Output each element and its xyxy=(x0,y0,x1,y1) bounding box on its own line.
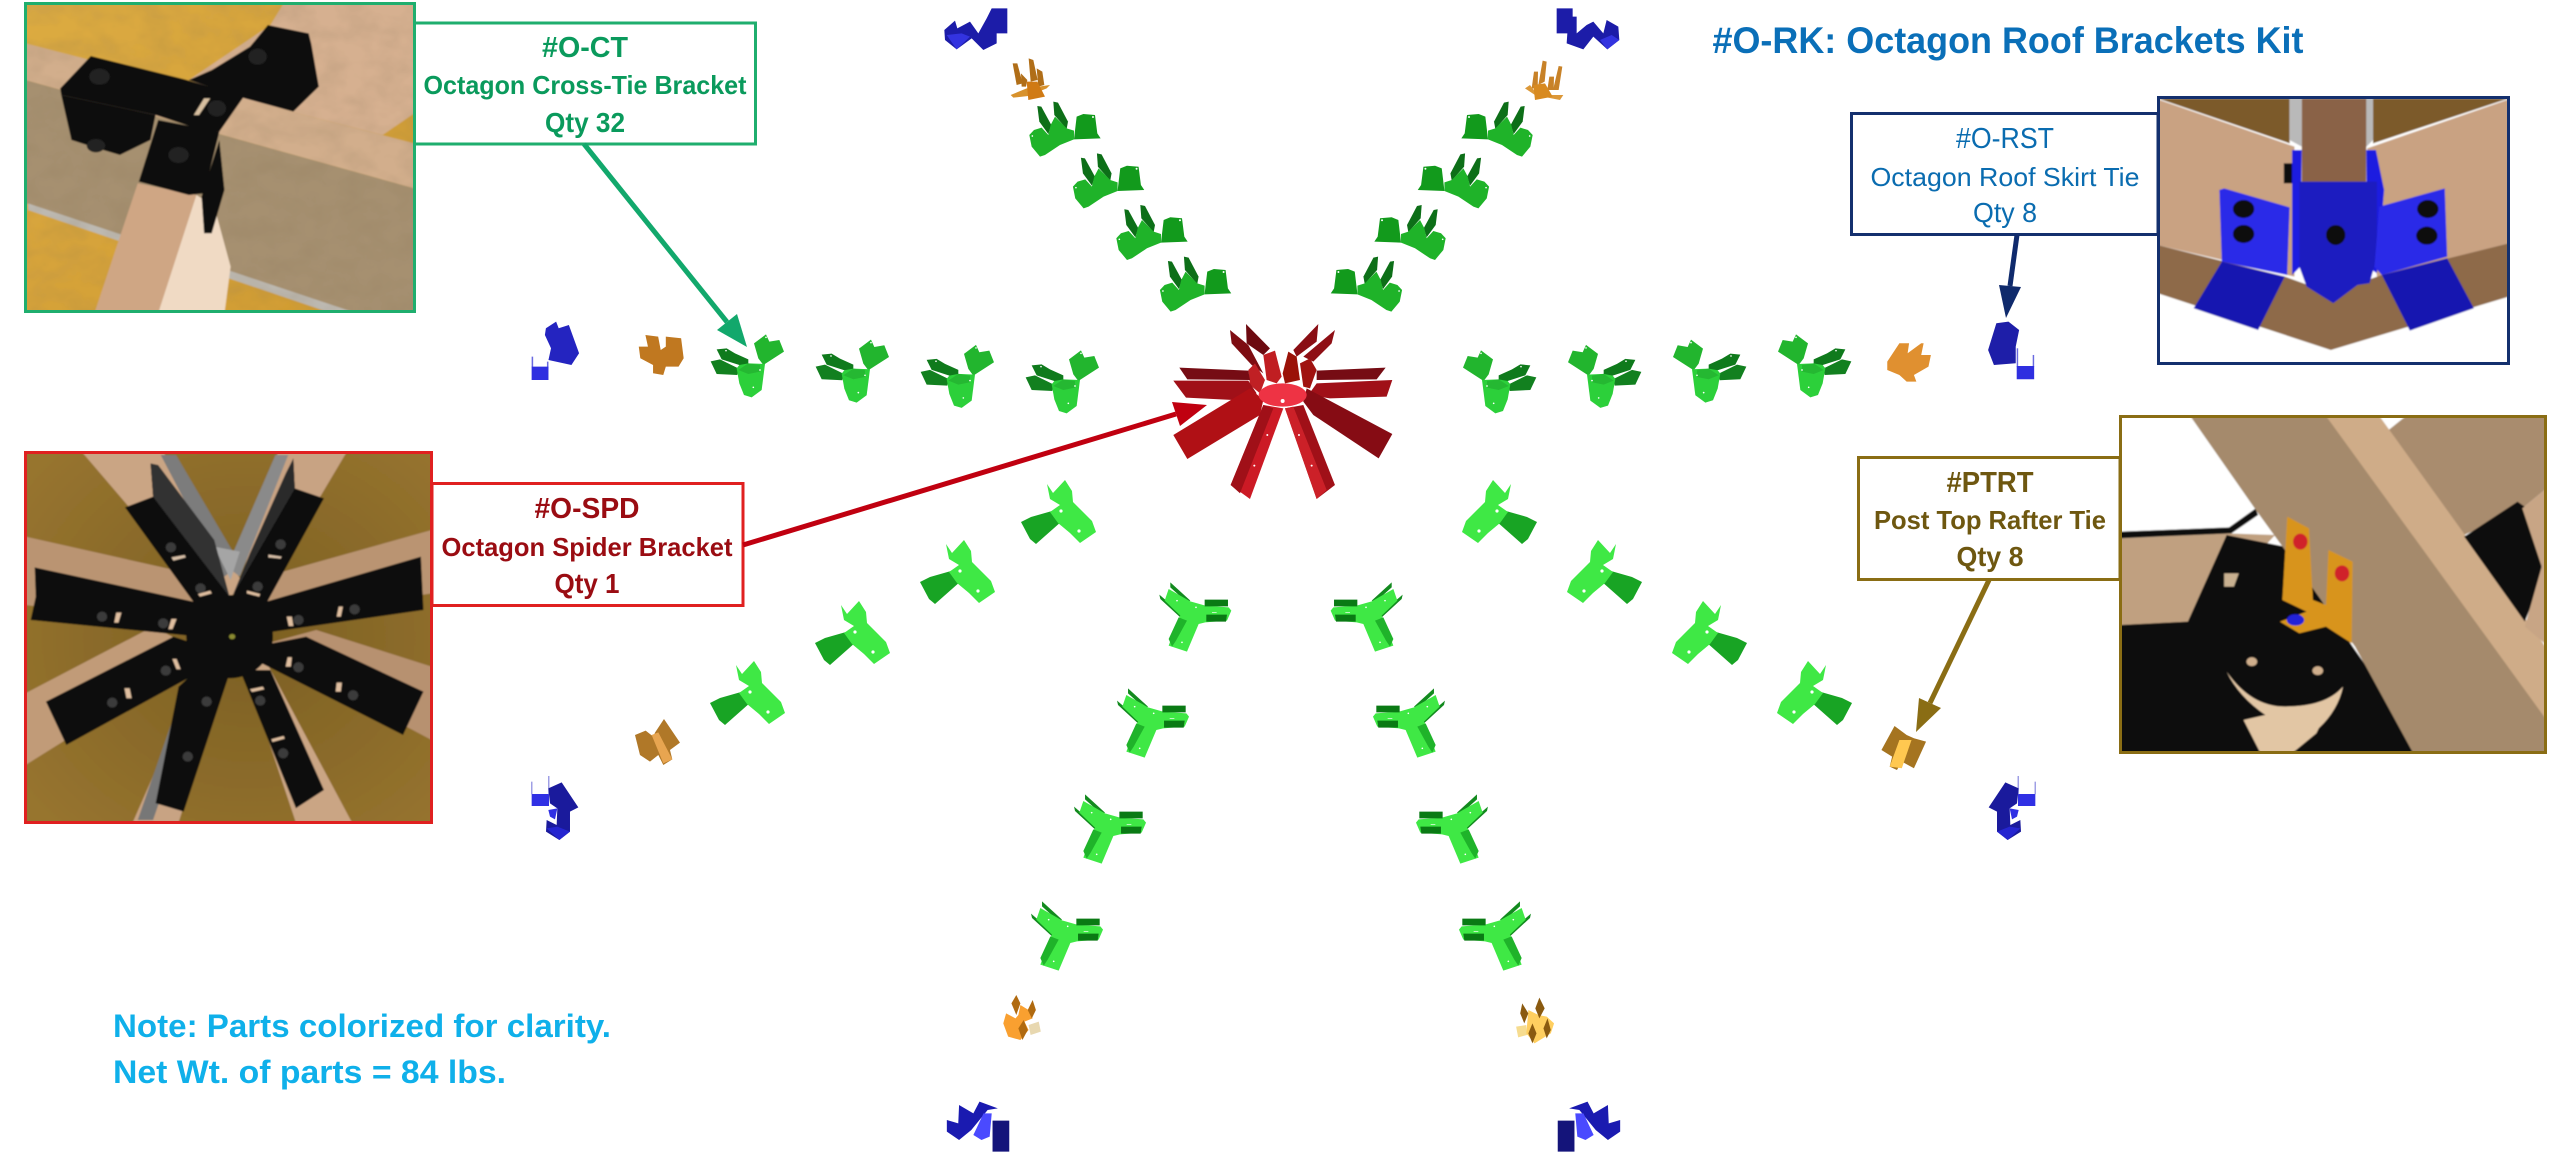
brackets: upper left diagonal xyxy=(1029,102,1231,312)
brackets: right row xyxy=(1463,334,1851,413)
panel: cross-tie bracket photo xyxy=(25,0,415,313)
callout: O-CT label: #O-CT xyxy=(542,32,628,64)
brackets: upper right diagonal xyxy=(1331,102,1533,312)
callout: O-RST label: #O-RST xyxy=(1956,123,2054,155)
note text: Net Wt. of parts = 84 lbs. xyxy=(113,1054,506,1090)
arrow: O-RST to blue tie xyxy=(1999,235,2021,318)
callout: O-RST label: Qty 8 xyxy=(1973,197,2037,228)
callout: O-CT label: Qty 32 xyxy=(545,107,625,138)
title: #O-RK: Octagon Roof Brackets Kit xyxy=(1712,20,2304,61)
callout: PTRT label xyxy=(1858,458,2120,580)
callout: PTRT label: Qty 8 xyxy=(1956,541,2024,572)
panel: post top rafter tie photo xyxy=(2120,416,2547,753)
rafter ties (orange) xyxy=(635,58,1931,1043)
callout: PTRT label: Post Top Rafter Tie xyxy=(1874,505,2106,535)
arrow: PTRT to orange tie xyxy=(1916,580,1989,732)
spider bracket (red) xyxy=(1173,324,1392,499)
callout: O-SPD label: Octagon Spider Bracket xyxy=(442,532,733,562)
callout: O-SPD label: #O-SPD xyxy=(534,493,640,525)
panel: spider bracket photo xyxy=(25,452,432,823)
skirt ties (blue) xyxy=(531,8,2036,1152)
panel: roof skirt tie photo xyxy=(2158,97,2509,364)
callout: O-SPD label: Qty 1 xyxy=(554,568,620,599)
brackets: bottom right column xyxy=(1331,582,1531,971)
brackets: bottom left column xyxy=(1031,582,1231,971)
arrow: O-SPD to spider bracket xyxy=(743,402,1207,545)
callout: O-CT label xyxy=(414,23,756,144)
brackets: lower right diagonal xyxy=(1462,480,1852,725)
callout: O-CT label: Octagon Cross-Tie Bracket xyxy=(424,70,747,100)
callout: O-RST label: Octagon Roof Skirt Tie xyxy=(1870,162,2140,192)
callout: O-SPD label xyxy=(432,484,743,606)
arrow: O-CT to green bracket xyxy=(584,144,747,347)
callout: PTRT label: #PTRT xyxy=(1946,467,2034,499)
note text: Note: Parts colorized for clarity. xyxy=(113,1008,611,1044)
brackets: lower left diagonal xyxy=(710,480,1096,725)
note text xyxy=(113,1008,611,1090)
callout: O-RST label xyxy=(1852,114,2158,234)
brackets: left row xyxy=(711,334,1099,413)
